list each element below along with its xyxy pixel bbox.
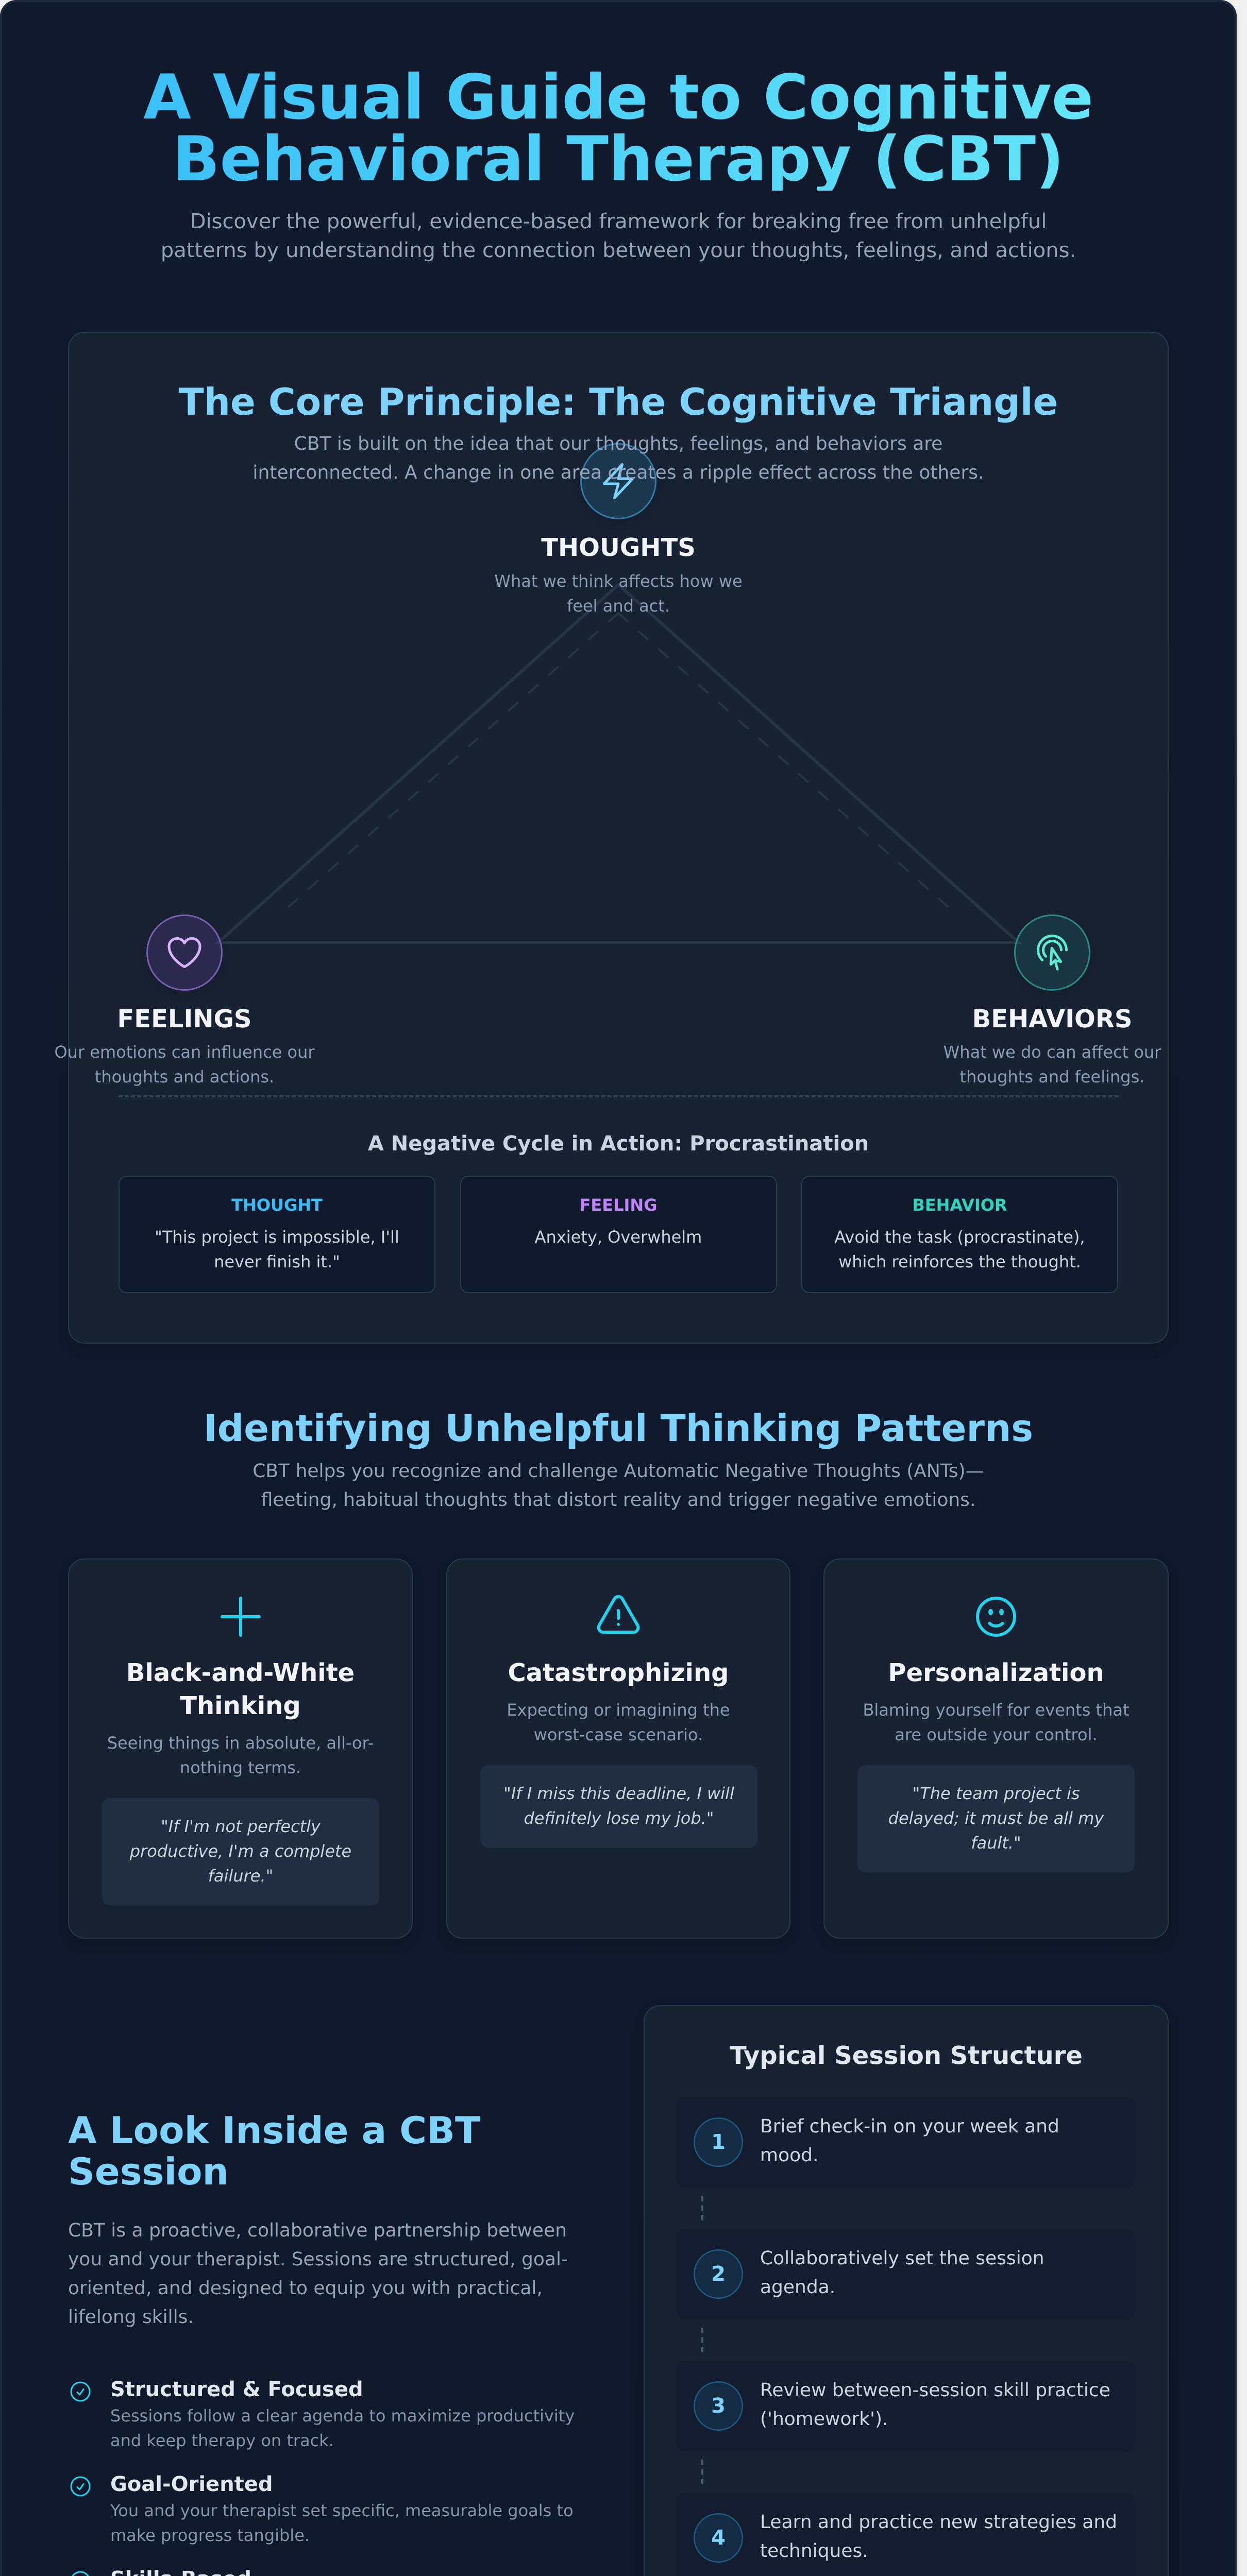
feature title: Structured & Focused [110, 2378, 363, 2401]
feelings description: thoughts and actions. [95, 1067, 274, 1087]
core principle description: CBT is built on the idea that our thoughts, feelings, and behaviors are [294, 433, 942, 454]
step 1 [677, 2097, 1135, 2188]
card title [126, 1658, 355, 1720]
thinking patterns description: fleeting, habitual thoughts that distort reality and trigger negative emotions. [261, 1489, 975, 1511]
session intro paragraph: lifelong skills. [68, 2307, 194, 2328]
step text: Review between-session skill practice [760, 2380, 1110, 2401]
feelings description: Our emotions can influence our [54, 1042, 315, 1062]
behavior text: which reinforces the thought. [838, 1252, 1081, 1272]
step text: Learn and practice new strategies and [760, 2512, 1117, 2533]
core principle description: interconnected. A change in one area creates a ripple effect across the others. [253, 462, 984, 483]
core principle description [253, 433, 984, 483]
card: personalization [823, 1558, 1169, 1939]
feelings description [54, 1042, 315, 1087]
step number [694, 2117, 743, 2167]
card title: Catastrophizing [508, 1658, 729, 1687]
session intro paragraph: CBT is a proactive, collaborative partnership between [68, 2220, 567, 2241]
card title: Black-and-White [126, 1658, 355, 1687]
thinking patterns description [252, 1461, 984, 1511]
thought text: "This project is impossible, I'll [155, 1227, 399, 1247]
card: black-and-white thinking [68, 1558, 413, 1939]
icon: heart [146, 914, 223, 991]
card title: Personalization [888, 1658, 1104, 1687]
feature description: You and your therapist set specific, measurable goals to [110, 2501, 574, 2520]
main title: Behavioral Therapy (CBT) [173, 124, 1064, 195]
feature description: make progress tangible. [110, 2526, 310, 2545]
thinking patterns description: CBT helps you recognize and challenge Automatic Negative Thoughts (ANTs)— [252, 1461, 984, 1482]
example quote: definitely lose my job." [524, 1808, 714, 1828]
icon: warning triangle [597, 1595, 640, 1634]
thought label: THOUGHT [231, 1195, 323, 1215]
step text [760, 2112, 1059, 2170]
example quote [480, 1765, 757, 1848]
card description [107, 1733, 374, 1777]
behaviors description [943, 1042, 1161, 1087]
card description [863, 1700, 1130, 1744]
step text: mood. [760, 2145, 818, 2166]
thought text [155, 1227, 399, 1272]
thoughts description: What we think affects how we [494, 571, 743, 591]
triangle diagram lines [214, 583, 1022, 944]
behavior text: Avoid the task (procrastinate), [834, 1227, 1085, 1247]
feeling label: FEELING [580, 1195, 657, 1215]
step number [694, 2381, 743, 2431]
behavior label: BEHAVIOR [912, 1195, 1007, 1215]
icon: lightning bolt [580, 443, 656, 519]
feature title: Goal-Oriented [110, 2472, 273, 2496]
node: behaviors [943, 914, 1161, 1087]
example quote: "If I'm not perfectly [161, 1817, 321, 1836]
thoughts label: THOUGHTS [541, 533, 696, 562]
negative cycle heading: A Negative Cycle in Action: Procrastination [368, 1132, 869, 1156]
panel heading: Typical Session Structure [730, 2041, 1083, 2070]
connector 1 to 2 [701, 2196, 703, 2221]
behaviors description: What we do can affect our [943, 1042, 1161, 1062]
example quote: fault." [971, 1833, 1021, 1853]
feelings label: FEELINGS [117, 1005, 251, 1033]
main title: A Visual Guide to Cognitive [143, 62, 1093, 133]
subtitle: Discover the powerful, evidence-based framework for breaking free from unhelpful [190, 210, 1047, 233]
subtitle [161, 210, 1076, 262]
example quote [102, 1798, 379, 1905]
step text: agenda. [760, 2277, 835, 2298]
step text: techniques. [760, 2540, 868, 2562]
step text: ('homework'). [760, 2409, 888, 2430]
step number [694, 2513, 743, 2563]
step number: 2 [711, 2262, 726, 2286]
session intro paragraph: you and your therapist. Sessions are structured, goal- [68, 2249, 568, 2270]
section heading: thinking patterns: Identifying Unhelpful Thinking Patterns [204, 1406, 1033, 1450]
example quote [857, 1765, 1135, 1872]
card: catastrophizing [446, 1558, 790, 1939]
behaviors label: BEHAVIORS [972, 1005, 1132, 1033]
section heading: inside a session: Session [68, 2150, 229, 2193]
card description: are outside your control. [895, 1725, 1098, 1744]
step text: Brief check-in on your week and [760, 2116, 1059, 2137]
section heading: core principle: The Core Principle: The Cognitive Triangle [179, 380, 1058, 423]
feature: skills-based [68, 2565, 604, 2576]
card description: Blaming yourself for events that [863, 1700, 1130, 1720]
icon: plus [221, 1597, 261, 1637]
feature: goal-oriented [68, 2470, 604, 2548]
step number [694, 2249, 743, 2299]
cycle card: thought [119, 1176, 435, 1293]
icon: check circle [70, 2381, 91, 2402]
card description: Seeing things in absolute, all-or- [107, 1733, 374, 1753]
step number: 1 [711, 2130, 726, 2154]
node: thoughts [494, 443, 743, 616]
step number: 3 [711, 2394, 726, 2418]
example quote: "The team project is [912, 1784, 1080, 1803]
feature description [110, 2498, 574, 2548]
panel: typical session structure [644, 2005, 1169, 2576]
feature description [110, 2403, 575, 2453]
step text [760, 2508, 1117, 2566]
step text: Collaboratively set the session [760, 2248, 1044, 2269]
icon: check circle [68, 2569, 93, 2576]
card description: Expecting or imagining the [507, 1700, 730, 1720]
connector 2 to 3 [701, 2328, 703, 2352]
step 4 [677, 2493, 1135, 2576]
thought text: never finish it." [214, 1252, 340, 1272]
cycle card: feeling [460, 1176, 777, 1293]
card description [507, 1700, 730, 1744]
panel: cognitive triangle [68, 332, 1169, 1344]
feature: structured and focused [70, 2378, 575, 2450]
feature description: and keep therapy on track. [110, 2431, 334, 2450]
card title: Thinking [180, 1691, 301, 1720]
session intro paragraph: oriented, and designed to equip you with practical, [68, 2278, 543, 2299]
step text [760, 2244, 1044, 2302]
thoughts description [494, 571, 743, 616]
behavior text [834, 1227, 1085, 1272]
cycle card: behavior [801, 1176, 1118, 1293]
step 2 [677, 2229, 1135, 2320]
section heading: inside a session [68, 2109, 480, 2193]
thoughts description: feel and act. [567, 596, 670, 616]
node: feelings [54, 914, 315, 1087]
step 3 [677, 2361, 1135, 2452]
example quote: productive, I'm a complete [130, 1841, 351, 1861]
example quote: delayed; it must be all my [888, 1808, 1104, 1828]
feature description: Sessions follow a clear agenda to maximize productivity [110, 2406, 575, 2426]
example quote: "If I miss this deadline, I will [503, 1784, 734, 1803]
icon: cursor ripple [1014, 914, 1090, 991]
feeling text: Anxiety, Overwhelm [535, 1227, 702, 1247]
subtitle: patterns by understanding the connection between your thoughts, feelings, and actions. [161, 239, 1076, 262]
section heading: inside a session: A Look Inside a CBT [68, 2109, 480, 2152]
step number: 4 [711, 2526, 726, 2550]
icon: smile [976, 1597, 1016, 1637]
session intro paragraph [68, 2220, 568, 2328]
card description: worst-case scenario. [534, 1725, 703, 1744]
icon: check circle [68, 2474, 93, 2499]
card description: nothing terms. [180, 1758, 301, 1777]
behaviors description: thoughts and feelings. [960, 1067, 1144, 1087]
main title [68, 67, 1169, 191]
example quote: failure." [208, 1866, 273, 1886]
connector 3 to 4 [701, 2460, 703, 2484]
step text [760, 2376, 1110, 2434]
